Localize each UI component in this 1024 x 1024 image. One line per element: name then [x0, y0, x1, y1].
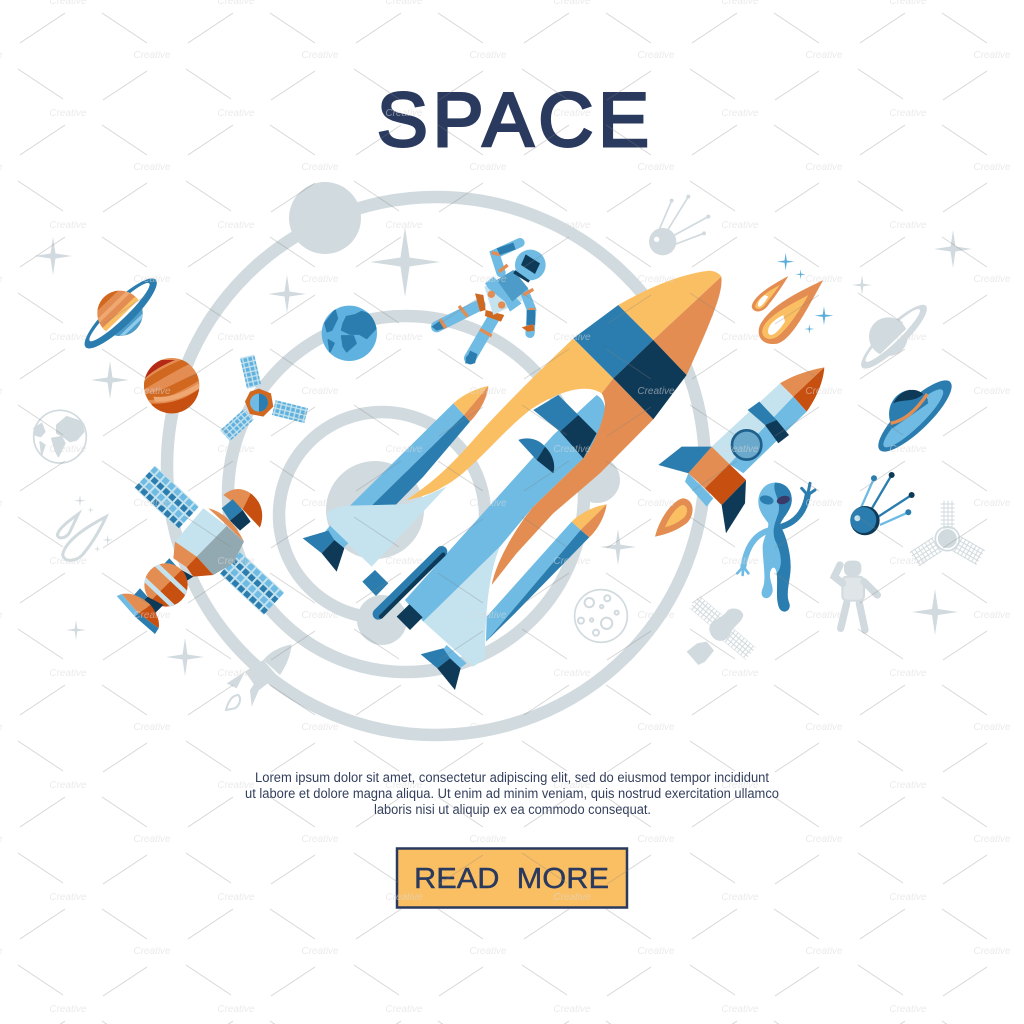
- main shuttle: [303, 271, 722, 690]
- orange tank side: [492, 378, 653, 585]
- orbit rings: [167, 197, 705, 735]
- yellow tank side: [407, 338, 613, 500]
- upper nozzle: [303, 526, 348, 572]
- right arm: [524, 292, 532, 333]
- upper solar panel: [134, 466, 199, 529]
- grey sputnik: [649, 195, 710, 255]
- lower booster: [486, 504, 607, 642]
- saturn planet: [84, 278, 157, 348]
- grey satellite lower: [687, 596, 756, 665]
- grey earth: [34, 410, 86, 463]
- upper booster: [350, 386, 488, 506]
- rocket flame: [655, 498, 693, 537]
- left arm: [495, 243, 520, 273]
- dark tube: [378, 552, 443, 617]
- astronaut: [432, 238, 546, 364]
- lower solar panel: [220, 552, 284, 615]
- grey stars: [34, 227, 972, 676]
- blue earth: [322, 306, 377, 361]
- alien: [737, 483, 815, 612]
- grey astronaut: [834, 561, 877, 630]
- lower wing: [423, 547, 500, 667]
- comets: [752, 276, 823, 344]
- read more button: [397, 848, 627, 908]
- grey satellite right: [910, 501, 985, 567]
- thruster blocks: [362, 570, 388, 596]
- lower nozzle: [421, 645, 467, 690]
- title: SPACE: [377, 78, 649, 163]
- navy block: [397, 604, 423, 630]
- cockpit dome: [518, 438, 545, 460]
- cockpit bands: [533, 395, 578, 432]
- blue stars: [777, 253, 833, 334]
- grey rocket: [226, 644, 292, 710]
- saucer planet: [870, 371, 960, 461]
- orbit planets: [289, 182, 620, 645]
- small colour satellite: [220, 355, 308, 441]
- jupiter planet: [144, 358, 200, 414]
- body text: [245, 770, 779, 817]
- nose cone: [618, 271, 721, 340]
- upper wing: [327, 487, 447, 567]
- big colour satellite: [117, 466, 284, 634]
- small rocket: [658, 367, 824, 533]
- right leg: [470, 318, 493, 358]
- body text: Lorem ipsum dolor sit amet, consectetur adipiscing elit, sed do eiusmod tempor incididunt: [255, 770, 769, 785]
- orbiter fuselage: [405, 395, 605, 622]
- blue sputnik: [850, 472, 915, 535]
- left leg: [437, 305, 480, 327]
- satellite body: [117, 489, 262, 634]
- grey comets: [57, 495, 113, 560]
- grey moon: [575, 590, 627, 642]
- body text: ut labore et dolore magna aliqua. Ut enim ad minim veniam, quis nostrud exercitation ullamco: [245, 786, 779, 801]
- tank bands: [573, 305, 653, 378]
- body text: laboris nisi ut aliquip ex ea commodo consequat.: [374, 802, 651, 817]
- grey saturn: [861, 304, 927, 368]
- read more button: READ MORE: [414, 863, 609, 895]
